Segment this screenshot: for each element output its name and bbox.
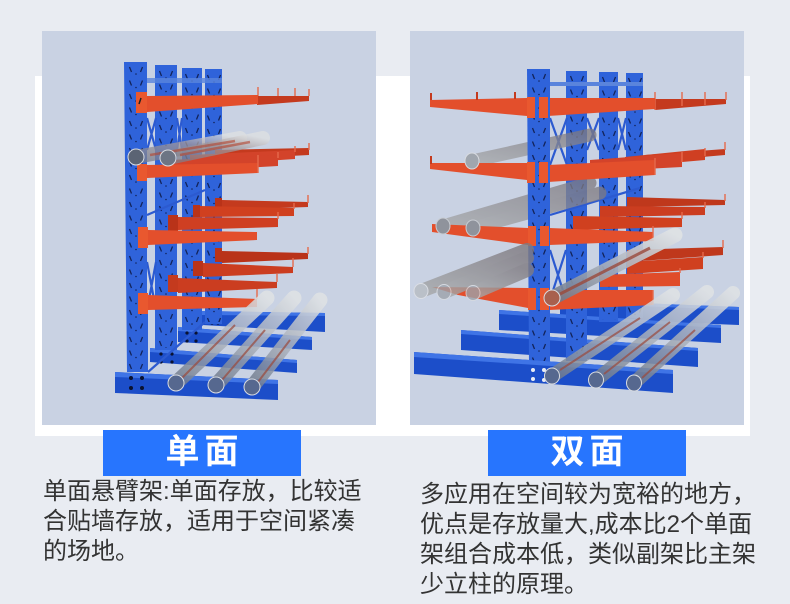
text block: double-sided description: [420, 481, 756, 598]
stored pipes: level 2: [128, 138, 263, 166]
text block: double-sided description: 架组合成本低，类似副架比主架: [420, 541, 756, 568]
panel: double-sided rack illustration: [410, 31, 744, 425]
stored pipes: floor level: [544, 292, 733, 391]
text block: single-sided description: 单面悬臂架:单面存放，比较适: [43, 478, 362, 505]
text block: double-sided description: 优点是存放量大,成本比2个单面: [420, 511, 752, 538]
rear columns: [147, 65, 223, 372]
red arms: level 3: [138, 195, 308, 248]
text block: double-sided description: 少立柱的原理。: [420, 571, 588, 598]
base beams: [461, 300, 739, 367]
red arms: level 1: [136, 87, 309, 113]
column brackets: [527, 97, 549, 310]
front column: [124, 62, 148, 372]
rear columns: [550, 71, 644, 361]
red arms: rear right levels: [573, 142, 725, 287]
heading: double-sided: 双面: [550, 433, 628, 471]
red arms: level 3: [432, 218, 653, 245]
front column: [527, 69, 550, 365]
stored pipes: floor level: [168, 298, 320, 395]
stored pipes: left level 4: [414, 250, 527, 300]
base beams: [150, 311, 325, 373]
red arms: level 4: [138, 247, 308, 314]
text block: single-sided description: [43, 478, 362, 565]
heading: single-sided: 单面: [166, 433, 244, 471]
front base beam: [414, 352, 673, 393]
front base beam: [115, 372, 278, 400]
heading: double-sided: [488, 430, 686, 476]
stored pipe: right level 4: [544, 235, 675, 306]
white backing card: [35, 76, 750, 436]
text block: double-sided description: 多应用在空间较为宽裕的地方，: [420, 481, 756, 508]
panel: single-sided rack illustration: [42, 31, 376, 425]
red arms: level 2: [137, 143, 309, 181]
pipes behind the column: [443, 135, 600, 228]
text block: single-sided description: 合贴墙存放，适用于空间紧凑: [43, 508, 355, 535]
red arms: level 1: [430, 92, 726, 116]
red arms: level 4: [432, 287, 653, 310]
heading: single-sided: [103, 430, 301, 476]
red arms: level 2: [430, 153, 655, 182]
text block: single-sided description: 的场地。: [43, 538, 139, 565]
